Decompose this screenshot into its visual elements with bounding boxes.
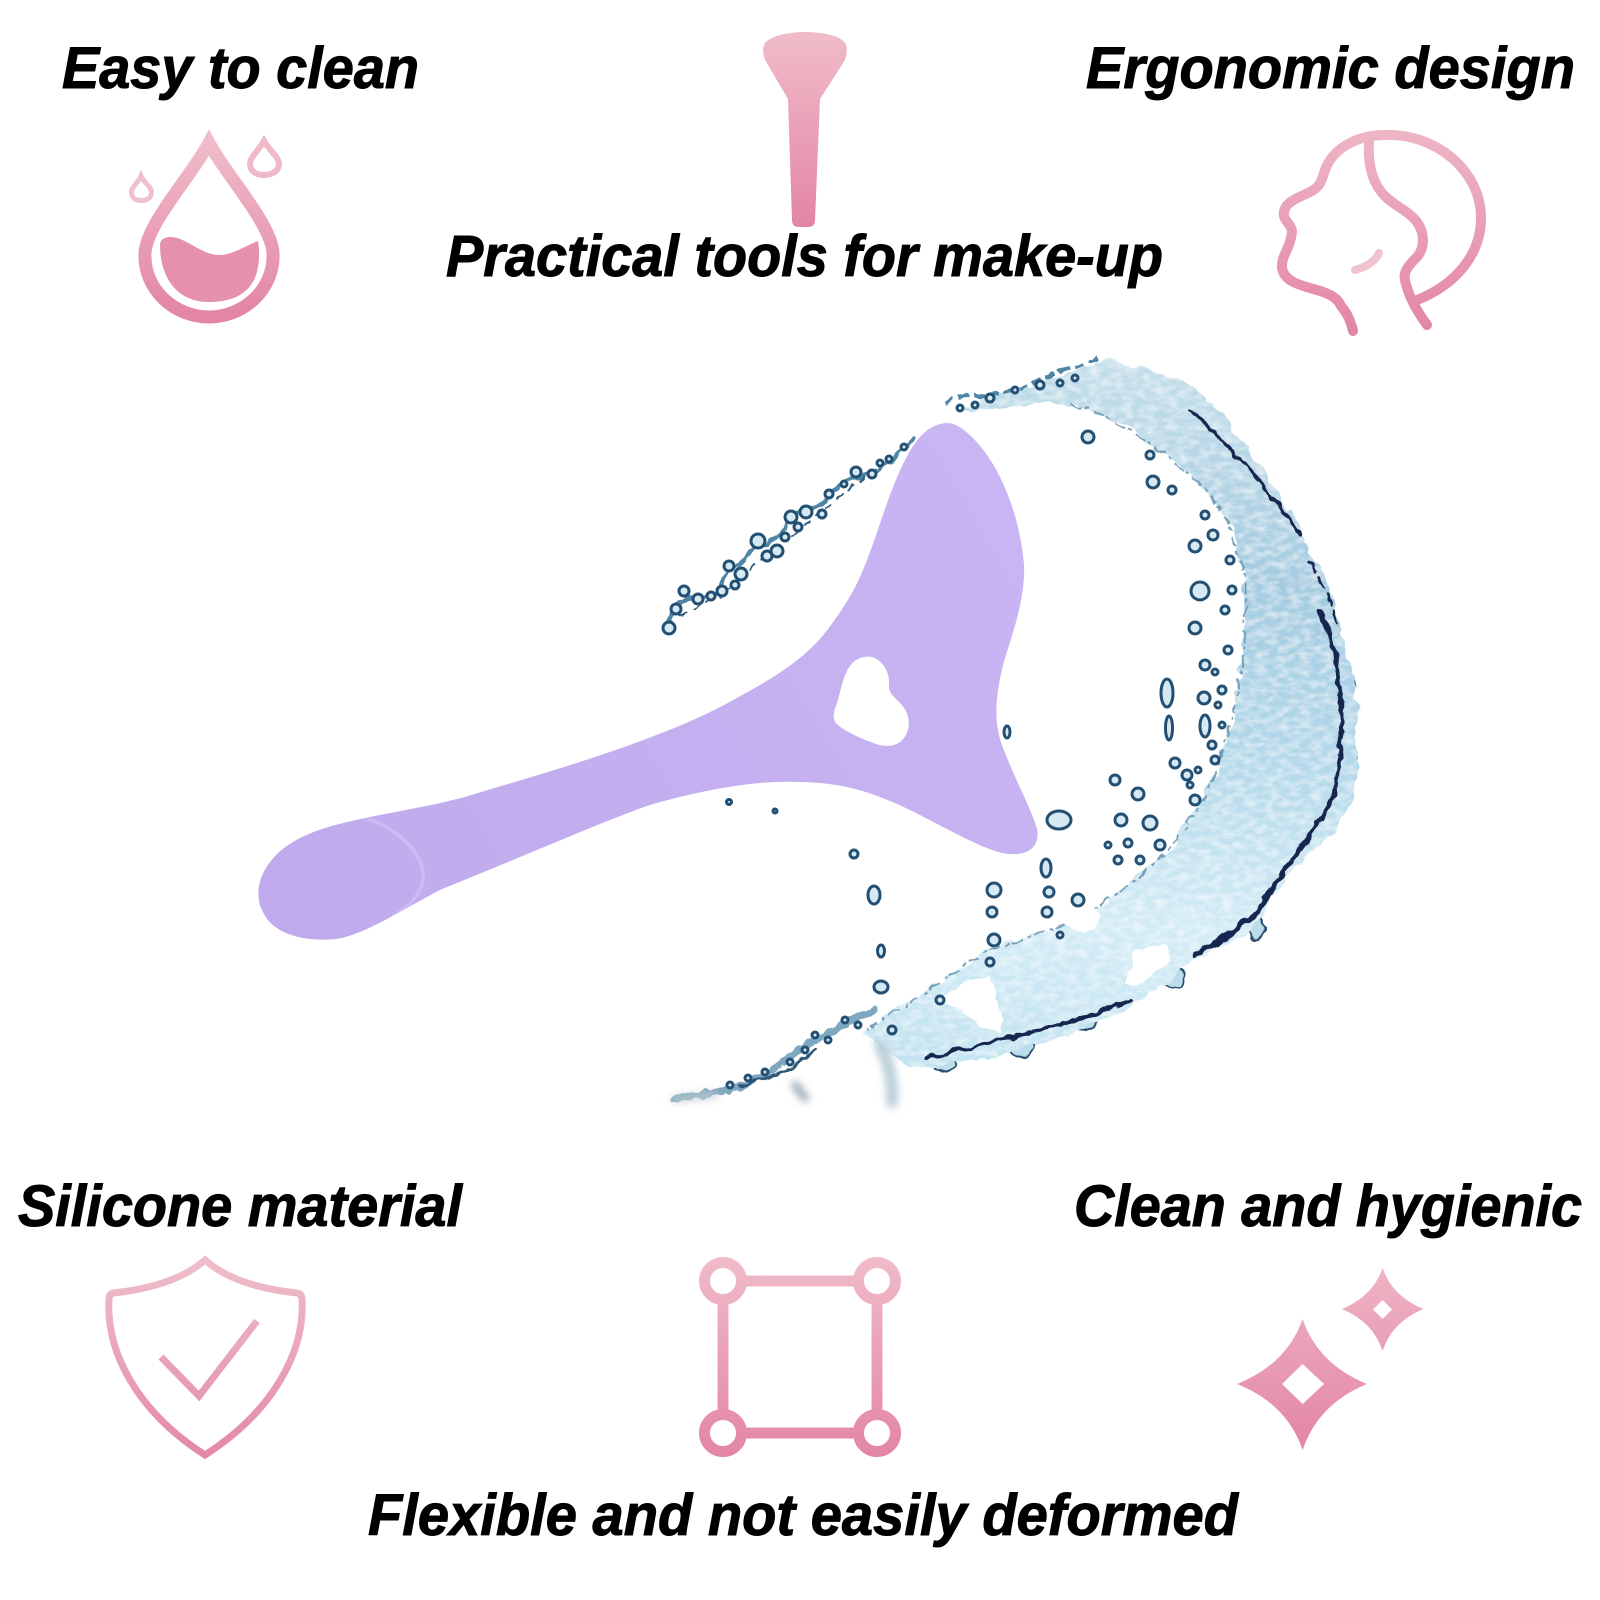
- icon: water drop: [132, 141, 279, 317]
- splash: outer scalloped drips: [931, 676, 1357, 1072]
- heading: Clean and hygienic: Clean and hygienic: [1074, 1174, 1582, 1239]
- icon: sparkles: [1237, 1268, 1424, 1450]
- heading: Ergonomic design: Ergonomic design: [1086, 36, 1575, 101]
- heading: Silicone material: Silicone material: [18, 1174, 464, 1239]
- splash: white gaps in the water: [935, 907, 1170, 1032]
- splash: main water arc: [865, 360, 1357, 1066]
- icon: make-up brush: [763, 32, 847, 227]
- splash: droplets: [663, 375, 1236, 1088]
- splash: lower tail: [674, 1010, 892, 1102]
- heading: Practical tools for make-up: Practical tools for make-up: [446, 224, 1163, 289]
- applicator spoon rim: [368, 819, 423, 916]
- product: purple silicone applicator: [258, 423, 1038, 940]
- icon: shield with check: [109, 1260, 302, 1455]
- splash: upper-left stream: [669, 358, 1100, 628]
- heading: Easy to clean: Easy to clean: [62, 36, 419, 101]
- icon: square with corner nodes: [704, 1262, 896, 1452]
- splash: stippled inner edge: [865, 405, 1245, 1031]
- heading: Flexible and not easily deformed: Flexible and not easily deformed: [368, 1483, 1240, 1548]
- icon: face profile: [1282, 135, 1481, 331]
- applicator body with heart hole: [258, 423, 1038, 940]
- splash: dark outer edge: [925, 410, 1342, 1058]
- water splash: [663, 358, 1357, 1102]
